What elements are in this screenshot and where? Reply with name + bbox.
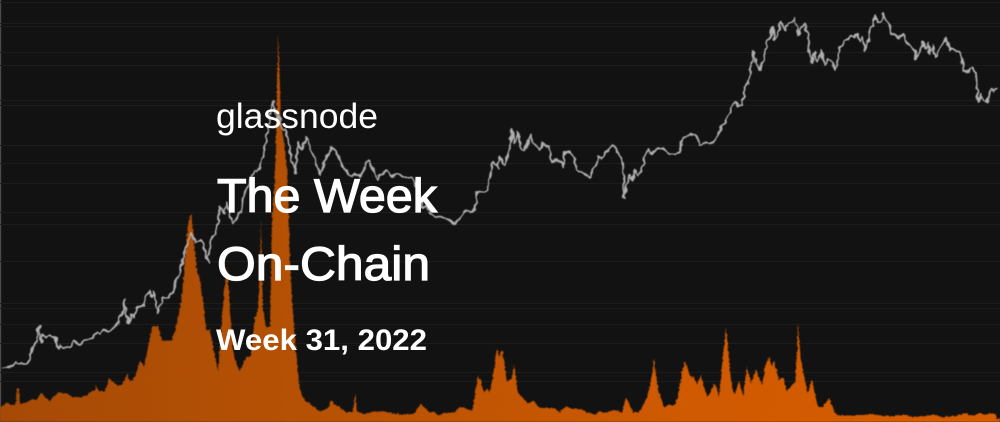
title: The Week: The Week: [217, 169, 438, 222]
subtitle: week and year: Week 31, 2022: [216, 324, 427, 357]
logo: glassnode: glassnode: [216, 97, 378, 136]
title: On-Chain: On-Chain: [217, 237, 430, 290]
